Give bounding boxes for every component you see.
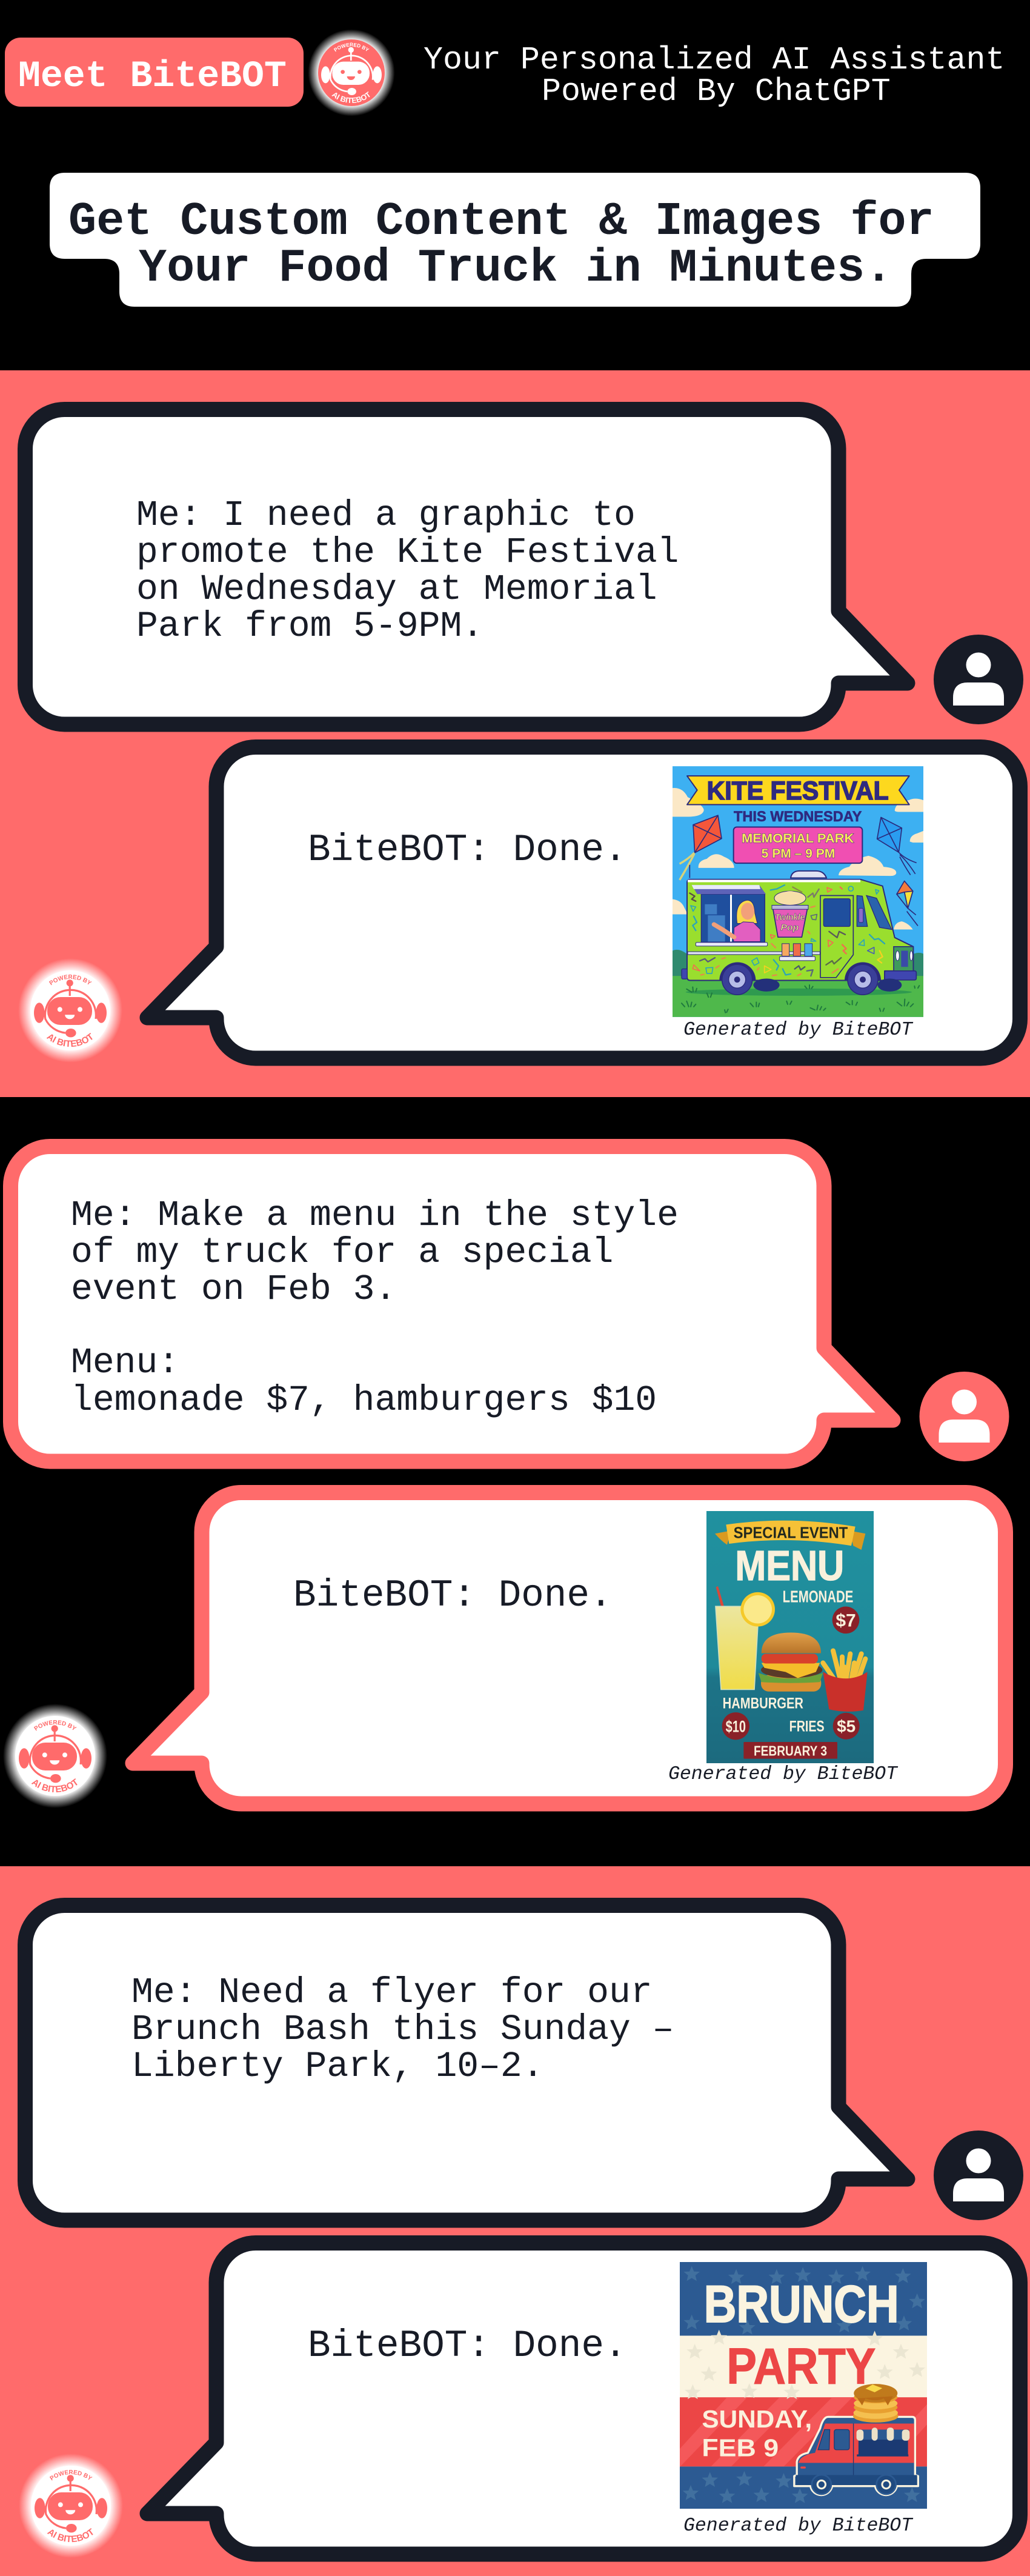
speech bubble: user request, menu: lemonade $7, hamburgers $10 (71, 1380, 657, 1421)
speech bubble: BiteBOT reply, Kite Festival: BiteBOT: Done. (308, 829, 627, 872)
speech bubble: user request, Kite Festival: promote the Kite Festival (136, 532, 679, 573)
generated flyer: Kite Festival: Twinkle (775, 913, 805, 923)
generated flyer: Brunch Party (680, 2262, 927, 2509)
icon: BiteBOT logo header (308, 30, 394, 116)
ribbon (715, 1530, 731, 1545)
header pill: Meet BiteBOT: Meet BiteBOT (18, 56, 287, 98)
kites (680, 815, 918, 926)
speech bubble: user request, Kite Festival: Me: I need a graphic to (136, 495, 636, 536)
header tagline: Powered By ChatGPT (542, 74, 891, 110)
background: coral section one (0, 370, 1030, 1097)
background: top black band (0, 0, 1030, 370)
title panel: Get Custom Content & Images for (68, 196, 934, 249)
generated flyer: Kite Festival: Pop (780, 923, 799, 933)
icon: BiteBOT logo header: POWERED BY (333, 42, 370, 52)
generated flyer: Kite Festival (673, 766, 923, 1017)
truck (791, 871, 826, 878)
serving window (701, 894, 765, 942)
speech bubble: user request, Kite Festival: Park from 5-9PM. (136, 606, 483, 647)
speech bubble: BiteBOT reply, menu (133, 1492, 1006, 1804)
lemonade (716, 1586, 727, 1618)
speech bubble: BiteBOT reply, menu: BiteBOT: Done. (293, 1574, 613, 1617)
title panel: Your Food Truck in Minutes. (139, 242, 892, 295)
generated flyer: Special Event Menu: FRIES (789, 1718, 825, 1735)
generated flyer: Special Event Menu: $7 (836, 1611, 856, 1631)
caption: Generated by BiteBOT: Generated by BiteBOT (668, 1764, 899, 1785)
generated flyer: Brunch Party: SUNDAY, (702, 2405, 812, 2433)
generated flyer: Special Event Menu: $10 (726, 1717, 746, 1735)
icon: BiteBOT logo one: POWERED BY (48, 975, 92, 986)
title panel (50, 173, 980, 307)
truck (794, 2417, 918, 2495)
pancakes (853, 2409, 899, 2423)
banner (687, 776, 909, 805)
generated flyer: Special Event Menu: $5 (837, 1717, 856, 1735)
generated flyer: Kite Festival: THIS WEDNESDAY (734, 809, 862, 825)
generated flyer: Brunch Party: PARTY (726, 2338, 875, 2394)
icon: BiteBOT logo two (4, 1704, 107, 1807)
generated flyer: Brunch Party: BRUNCH (704, 2275, 899, 2334)
generated flyer: Kite Festival: KITE FESTIVAL (707, 776, 889, 806)
speech bubble: user request, menu: of my truck for a special (71, 1232, 613, 1273)
generated flyer: Kite Festival: MEMORIAL PARK (742, 831, 854, 846)
generated flyer: Brunch Party: FEB 9 (702, 2434, 779, 2462)
wheels (719, 963, 756, 981)
burger (761, 1675, 821, 1692)
background: coral section three (0, 1866, 1030, 2576)
icon: BiteBOT logo one (19, 959, 121, 1062)
generated flyer: Kite Festival: 5 PM – 9 PM (762, 846, 835, 861)
icon: user avatar two (920, 1372, 1009, 1461)
speech bubble: user request, menu: event on Feb 3. (71, 1269, 396, 1310)
speech bubble: user request, brunch: Brunch Bash this Sunday – (131, 2009, 674, 2050)
header pill: Meet BiteBOT (5, 38, 304, 107)
speech bubble: user request, menu: Me: Make a menu in the style (71, 1195, 679, 1236)
header tagline: Your Personalized AI Assistant (424, 42, 1005, 79)
speech bubble: user request, brunch: Liberty Park, 10–2. (131, 2046, 544, 2087)
generated flyer: Special Event Menu (706, 1511, 874, 1763)
speech bubble: BiteBOT reply, brunch (147, 2243, 1020, 2554)
icon: BiteBOT logo three: AI BITEBOT (47, 2528, 93, 2542)
speech bubble: user request, Kite Festival: on Wednesday at Memorial (136, 569, 657, 610)
caption: Generated by BiteBOT: Generated by BiteBOT (683, 1019, 914, 1041)
speech bubble: user request, menu (11, 1147, 893, 1461)
generated flyer: Special Event Menu: SPECIAL EVENT (734, 1524, 848, 1542)
icon: user avatar three (934, 2131, 1023, 2220)
speech bubble: BiteBOT reply, Kite Festival (147, 747, 1020, 1058)
icon: BiteBOT logo three: POWERED BY (50, 2470, 92, 2480)
caption: Generated by BiteBOT: Generated by BiteBOT (683, 2515, 914, 2537)
fries (823, 1650, 865, 1680)
icon: BiteBOT logo three (19, 2455, 122, 2557)
generated flyer: Special Event Menu: MENU (735, 1542, 844, 1589)
generated flyer: Special Event Menu: FEBRUARY 3 (754, 1743, 827, 1759)
generated flyer: Special Event Menu: HAMBURGER (723, 1695, 803, 1712)
bucket (774, 891, 806, 906)
background: black section two (0, 1097, 1030, 1866)
speech bubble: user request, brunch (25, 1906, 908, 2220)
speech bubble: user request, brunch: Me: Need a flyer for our (131, 1972, 653, 2013)
door and cab (820, 896, 853, 978)
speech bubble: BiteBOT reply, brunch: BiteBOT: Done. (308, 2324, 627, 2367)
speech bubble: user request, menu: Menu: (71, 1342, 179, 1383)
icon: BiteBOT logo two: POWERED BY (34, 1720, 76, 1731)
speech bubble: user request, Kite Festival (25, 410, 908, 724)
icon: user avatar one (934, 635, 1023, 724)
cups and shelf (782, 944, 789, 956)
confetti (689, 885, 885, 976)
icon: BiteBOT logo two: AI BITEBOT (32, 1778, 78, 1793)
icon: BiteBOT logo one: AI BITEBOT (46, 1033, 93, 1047)
icon: BiteBOT logo header: AI BITEBOT (331, 91, 370, 103)
